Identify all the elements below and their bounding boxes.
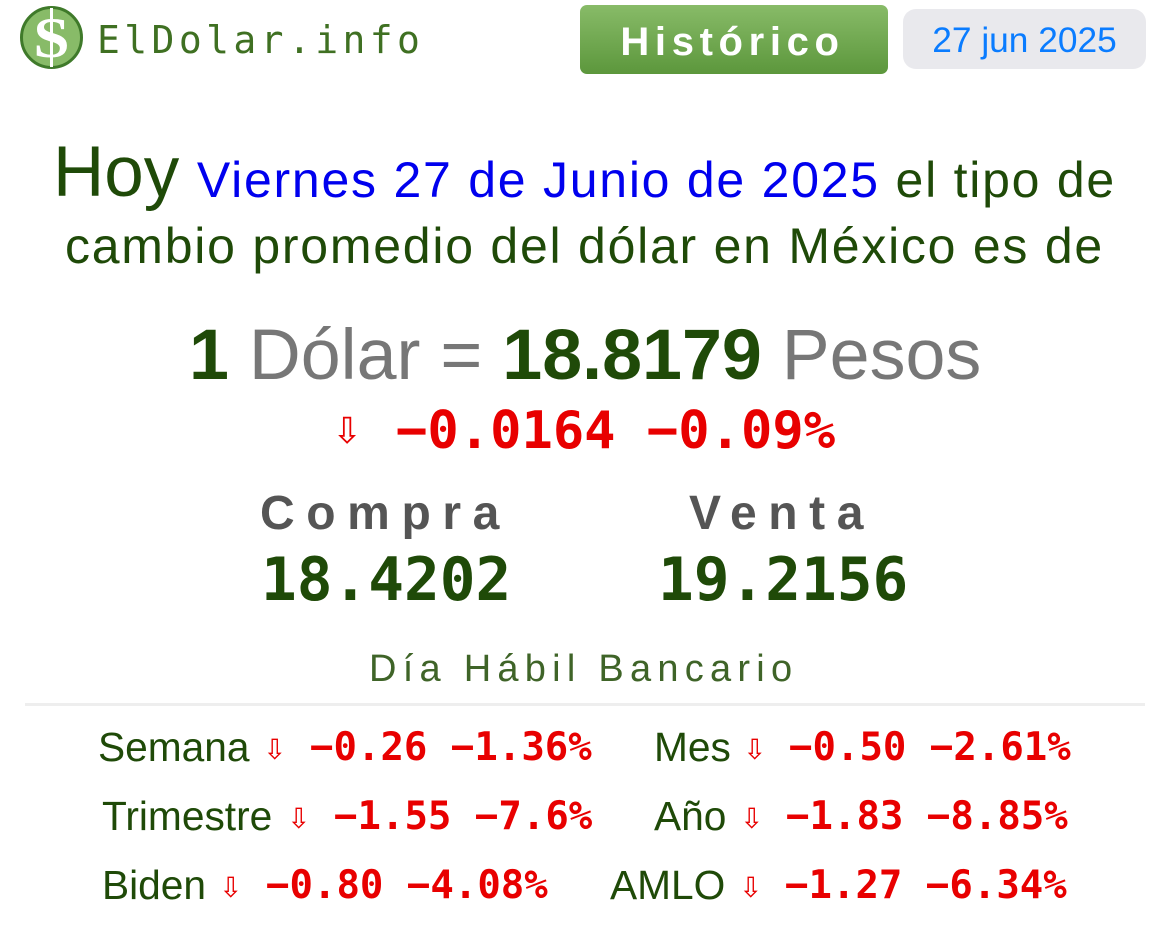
stat: Trimestre (102, 793, 592, 839)
icon: dollar logo: S (33, 7, 70, 70)
compra label: Compra (260, 487, 511, 540)
stat: Año: Año (654, 793, 726, 839)
venta value: 19.2156 (658, 546, 908, 615)
stat: AMLO: AMLO (610, 862, 725, 908)
stat: Biden: Biden (102, 862, 206, 908)
stat: Biden (102, 862, 548, 908)
stat: Mes (654, 724, 1071, 770)
button: Histórico: Histórico (620, 20, 845, 64)
headline line 2: cambio promedio del dólar en México es de (65, 218, 1104, 274)
stat: AMLO: ⇩ (739, 871, 762, 904)
stat: Mes: −0.50 −2.61% (789, 725, 1071, 770)
venta label: Venta (689, 487, 875, 540)
stat: Año (654, 793, 1068, 839)
stat: Trimestre: −1.55 −7.6% (334, 794, 592, 839)
footer note: Día Hábil Bancario (369, 648, 798, 690)
date badge: 27 jun 2025 (932, 21, 1117, 60)
daily change (332, 401, 835, 461)
stat: Semana: ⇩ (263, 733, 286, 766)
stat: Año: ⇩ (740, 802, 763, 835)
text: −0.0164 −0.09% (396, 401, 835, 461)
date badge (903, 9, 1146, 69)
stat: Mes: Mes (654, 724, 731, 770)
stat: AMLO: −1.27 −6.34% (785, 863, 1067, 908)
stat: Semana: −0.26 −1.36% (310, 725, 592, 770)
stat: Semana: Semana (98, 724, 250, 770)
stat: Biden: −0.80 −4.08% (266, 863, 548, 908)
stat: Trimestre: ⇩ (287, 802, 310, 835)
headline line 1: Hoy Viernes 27 de Junio de 2025 el tipo de (53, 133, 1116, 212)
text: ⇩ (332, 411, 362, 452)
stat: Año: −1.83 −8.85% (786, 794, 1068, 839)
stat: Biden: ⇩ (219, 871, 242, 904)
stat: Mes: ⇩ (743, 733, 766, 766)
exchange rate: 1 Dólar = 18.8179 Pesos (189, 315, 981, 395)
stat: AMLO (610, 862, 1067, 908)
compra value: 18.4202 (261, 546, 511, 615)
stat: Semana (98, 724, 592, 770)
stat: Trimestre: Trimestre (102, 793, 272, 839)
icon: dollar logo (20, 6, 83, 70)
logo wordmark: ElDolar.info (97, 18, 424, 62)
button: Histórico (580, 5, 888, 74)
